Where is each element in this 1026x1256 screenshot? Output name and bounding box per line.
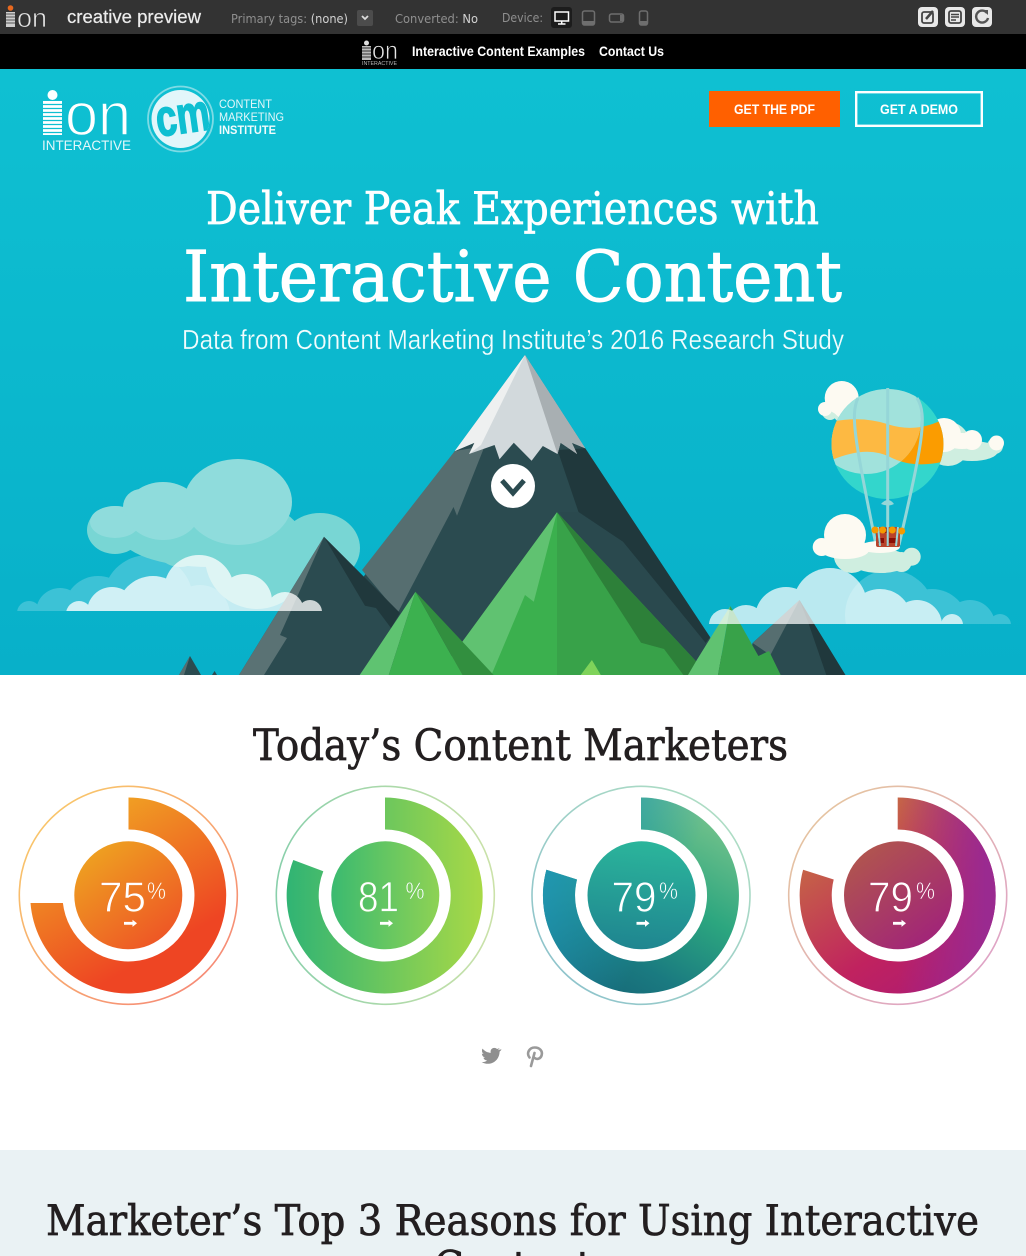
stat ring: 79% teal: 79 <box>612 874 656 922</box>
button: get a demo <box>856 92 982 126</box>
stat ring: 79% magenta <box>789 786 1007 1004</box>
device label: Device: <box>502 11 543 25</box>
hero heading line 2: Interactive Content <box>183 236 842 318</box>
balloon ribs <box>854 388 922 546</box>
scroll down button <box>491 464 535 508</box>
button: get the pdf <box>709 91 840 127</box>
icon: notes button <box>945 7 965 27</box>
stat ring: 79% teal <box>532 786 750 1004</box>
navigation bar <box>0 34 1026 69</box>
hero panel <box>0 69 1026 675</box>
snow cap <box>455 355 585 461</box>
pale front cloud left <box>66 555 322 611</box>
stat ring: 79% magenta: % <box>916 878 935 905</box>
content marketing institute logo <box>148 84 284 152</box>
section heading: Today’s Content Marketers <box>253 721 788 771</box>
left mountain <box>239 536 400 675</box>
icon: desktop selected <box>551 7 572 28</box>
icon: edit button <box>918 7 938 27</box>
top toolbar <box>0 0 1026 34</box>
stat ring: 75%: % <box>147 878 166 905</box>
stat ring: 79% teal: % <box>659 878 678 905</box>
hero subheading: Data from Content Marketing Institute’s 2016 Research Study <box>182 324 844 355</box>
content marketing institute logo: CONTENT <box>219 97 273 111</box>
icon: pinterest <box>528 1048 542 1066</box>
hot air balloon <box>832 388 944 546</box>
nav link: Contact Us <box>599 43 664 59</box>
central green mountain <box>438 512 709 675</box>
ion interactive logo: INTERACTIVE <box>42 137 131 153</box>
icon: twitter <box>482 1048 502 1064</box>
right shadow face <box>558 448 710 643</box>
stat ring: 75% <box>19 786 237 1004</box>
stat ring: 81%: % <box>406 878 424 905</box>
right dark mountain <box>745 600 845 675</box>
toolbar title: creative preview <box>67 7 202 27</box>
icon: landscape tablet <box>610 14 624 22</box>
ion interactive logo <box>43 90 130 150</box>
dropdown button <box>357 10 373 26</box>
primary tags filter: Primary tags: (none) <box>231 12 348 26</box>
button: get a demo: GET A DEMO <box>880 101 958 117</box>
stat ring: 81% <box>276 786 494 1004</box>
cream cloud behind balloon <box>818 381 1004 466</box>
content marketing institute logo: cm <box>152 84 213 149</box>
content marketing institute logo: INSTITUTE <box>219 123 276 137</box>
right green mountain <box>688 606 781 675</box>
back cloud right <box>845 571 1011 624</box>
nav link: Interactive Content Examples <box>412 43 585 59</box>
back cloud left <box>17 556 230 611</box>
main mountain <box>362 355 722 674</box>
toolbar ion logo: on <box>17 3 47 33</box>
tiny far mountains <box>179 656 217 675</box>
ion interactive logo: on <box>65 81 131 148</box>
hero heading line 1: Deliver Peak Experiences with <box>206 182 819 235</box>
large teal cloud <box>87 459 360 609</box>
pale front cloud right <box>709 568 963 624</box>
nav ion logo: on <box>372 37 398 65</box>
button: get the pdf: GET THE PDF <box>734 101 815 117</box>
icon: refresh button <box>972 7 992 27</box>
reasons section panel <box>0 1150 1026 1256</box>
small bright peak <box>581 660 601 675</box>
lower cream cloud <box>813 514 921 573</box>
balloon basket <box>872 526 905 547</box>
icon: tablet <box>582 11 594 25</box>
content marketing institute logo: MARKETING <box>219 110 284 124</box>
icon: phone <box>640 11 648 25</box>
left lit face <box>362 446 485 613</box>
stat ring: 81%: 81 <box>358 874 399 922</box>
stat ring: 75%: 75 <box>99 874 146 922</box>
stat ring: 79% magenta: 79 <box>868 874 913 922</box>
nav ion logo: INTERACTIVE <box>362 61 398 67</box>
converted status: Converted: No <box>395 12 478 26</box>
nav ion logo <box>362 37 398 67</box>
left green mountain <box>360 592 494 675</box>
